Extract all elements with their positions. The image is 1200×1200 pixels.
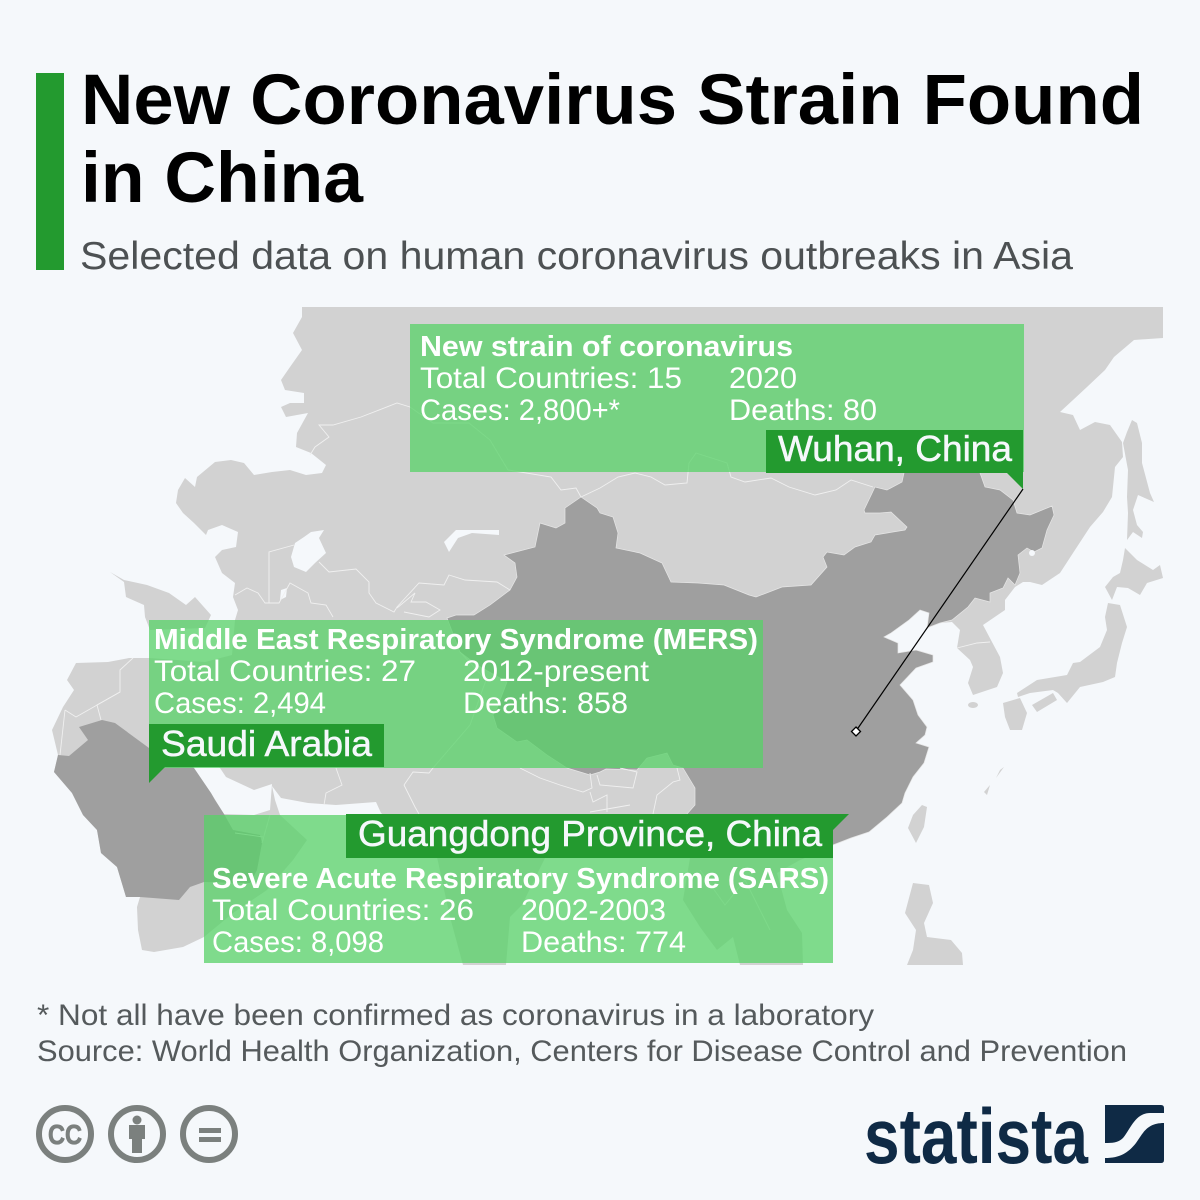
footnote and source: * Not all have been confirmed as coronavirus in a laboratory — [37, 999, 874, 1032]
stats: new strain: 2020 — [729, 362, 797, 395]
subtitle: Selected data on human coronavirus outbreaks in Asia — [80, 235, 1073, 278]
icon: creative commons — [39, 1108, 91, 1160]
title accent bar — [36, 73, 64, 270]
icon: statista logo — [1105, 1105, 1164, 1163]
stats: new strain — [420, 362, 877, 427]
stats: SARS — [212, 894, 686, 959]
stats: SARS: 2002-2003 — [521, 894, 666, 927]
stats: new strain: Total Countries: 15 — [420, 362, 682, 395]
map of Asia — [52, 307, 1163, 965]
country borders — [60, 403, 990, 930]
icon: attribution — [111, 1108, 163, 1160]
stats: SARS: Deaths: 774 — [521, 926, 686, 959]
leader line to Wuhan marker — [852, 489, 1023, 736]
location label: Guangdong Province, China: Guangdong Province, China — [358, 813, 823, 854]
seas and lakes — [170, 409, 1090, 815]
panel: SARS — [204, 815, 833, 963]
Turkey region — [110, 572, 211, 630]
panel: new strain of coronavirus — [410, 324, 1024, 472]
panel: MERS — [149, 620, 763, 768]
panel heading: MERS: Middle East Respiratory Syndrome (MERS) — [154, 624, 758, 656]
landmass: light grey countries — [52, 307, 1163, 965]
stats: MERS: Cases: 2,494 — [154, 687, 326, 720]
location label: Saudi Arabia: Saudi Arabia — [161, 723, 373, 764]
stats: MERS: Deaths: 858 — [463, 687, 628, 720]
footnote and source: Source: World Health Organization, Centers for Disease Control and Prevention — [37, 1035, 1127, 1068]
islands: Japan, Sakhalin, Taiwan, Philippines — [905, 420, 1163, 965]
panel heading: SARS: Severe Acute Respiratory Syndrome (SARS) — [212, 863, 829, 895]
icon: no derivatives — [183, 1108, 235, 1160]
stats: new strain: Deaths: 80 — [729, 394, 877, 427]
stats: new strain: Cases: 2,800+* — [420, 394, 620, 427]
lake near the Russia-China coast — [1029, 550, 1035, 556]
location label: Wuhan, China: Wuhan, China — [778, 428, 1013, 469]
panel heading: new strain: New strain of coronavirus — [420, 331, 793, 363]
location label: Saudi Arabia — [149, 723, 384, 783]
statista wordmark: statista — [864, 1092, 1088, 1180]
title: New Coronavirus Strain Found — [81, 61, 1144, 140]
icon: creative commons: CC — [48, 1119, 82, 1150]
stats: SARS: Total Countries: 26 — [212, 894, 474, 927]
location label: Wuhan, China — [766, 428, 1023, 489]
country: Saudi Arabia (highlighted) — [54, 720, 262, 900]
stats: MERS — [154, 655, 650, 720]
footnote and source — [37, 999, 1127, 1068]
title — [81, 61, 1144, 218]
stats: SARS: Cases: 8,098 — [212, 926, 384, 959]
icon: Wuhan marker — [852, 727, 860, 736]
country: China (highlighted) — [447, 455, 1054, 858]
title: in China — [81, 139, 364, 218]
stats: MERS: 2012-present — [463, 655, 650, 688]
stats: MERS: Total Countries: 27 — [154, 655, 416, 688]
